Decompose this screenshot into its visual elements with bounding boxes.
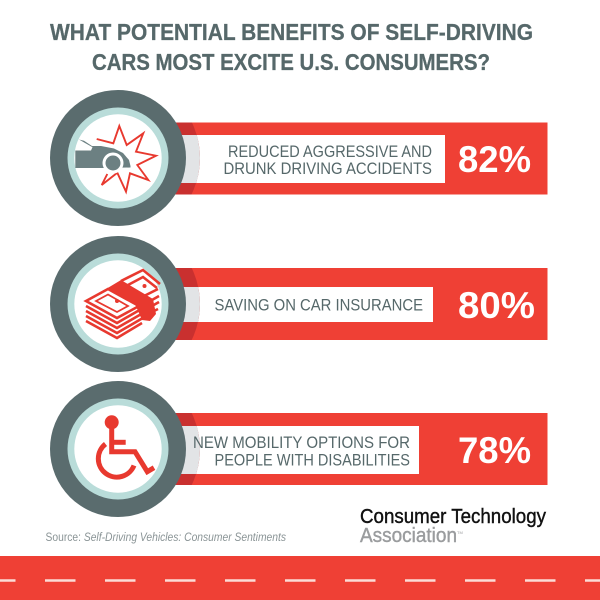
percentage: 78% (458, 430, 531, 471)
icon: car crash (75, 126, 156, 192)
logo: Consumer Technology Association (360, 506, 546, 547)
panel: reduced accidents 82% (50, 90, 548, 226)
label text: NEW MOBILITY OPTIONS FOR (193, 434, 410, 452)
road (0, 556, 600, 600)
icon circle (50, 90, 186, 226)
logo: Consumer Technology Association: TM (457, 530, 463, 535)
bar shadow (176, 413, 200, 485)
panel: mobility options 78% (50, 381, 548, 517)
label text (193, 434, 410, 470)
percentage: 82% (458, 139, 531, 180)
label text: DRUNK DRIVING ACCIDENTS (224, 160, 432, 178)
label text: REDUCED AGGRESSIVE AND (228, 143, 432, 161)
icon circle (50, 381, 186, 517)
percentage: 80% (458, 285, 535, 326)
box shadow (181, 135, 200, 183)
box shadow (181, 426, 200, 474)
label box (150, 426, 419, 474)
logo: Consumer Technology Association: Consumer Technology (360, 506, 546, 528)
box shadow (184, 287, 200, 322)
title: WHAT POTENTIAL BENEFITS OF SELF-DRIVING (50, 19, 533, 45)
icon: stack of money (86, 270, 160, 338)
label box (150, 287, 433, 322)
label text (224, 143, 432, 178)
label box (150, 135, 445, 183)
logo: Consumer Technology Association: Association (360, 525, 457, 547)
label text: SAVING ON CAR INSURANCE (214, 297, 423, 315)
icon: wheelchair (98, 415, 154, 477)
bar shadow (176, 268, 200, 340)
title (50, 19, 533, 75)
source note: Source: Self-Driving Vehicles: Consumer Sentiments (46, 530, 286, 544)
red bar (150, 268, 548, 340)
label text: PEOPLE WITH DISABILITIES (214, 452, 410, 470)
panel: car insurance 80% (50, 236, 548, 372)
red bar (150, 413, 548, 485)
red bar (150, 122, 548, 194)
title: CARS MOST EXCITE U.S. CONSUMERS? (92, 49, 490, 75)
bar shadow (176, 122, 200, 194)
icon circle (50, 236, 186, 372)
